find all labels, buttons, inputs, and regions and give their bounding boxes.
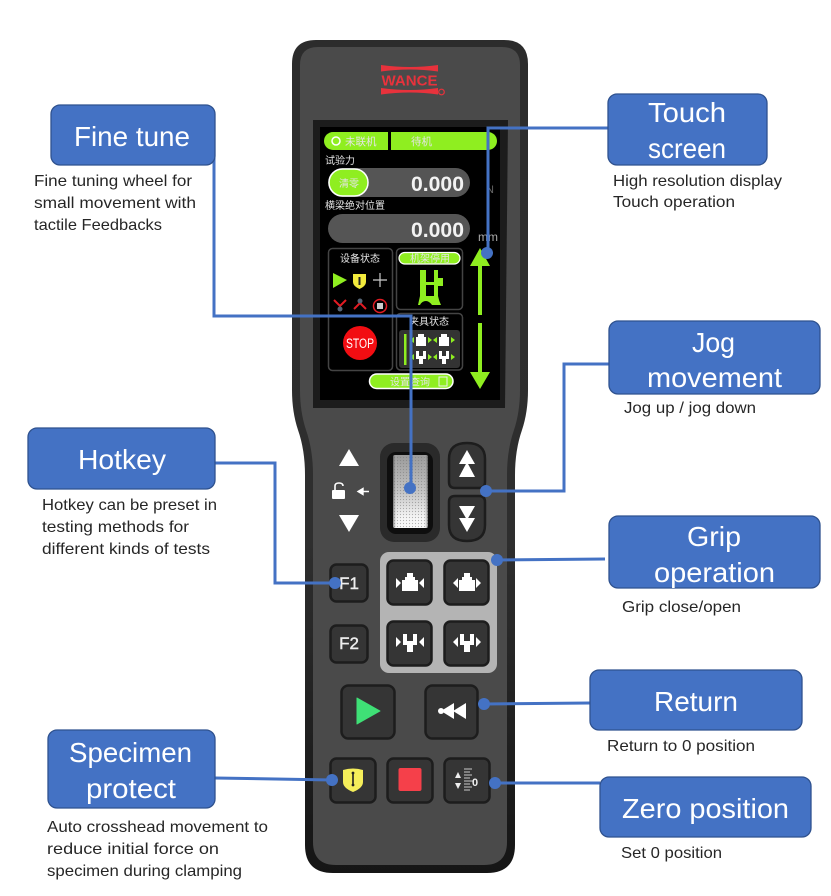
status bar pills — [324, 132, 497, 150]
position readout: 横梁绝对位置 — [325, 199, 385, 212]
description: specimen protect: Auto crosshead movement to — [47, 819, 268, 836]
stop key — [388, 758, 432, 802]
device status panel — [328, 248, 392, 370]
force readout: N — [486, 184, 494, 196]
callout: fine tune — [51, 105, 215, 165]
device status panel: 设备状态 — [340, 252, 380, 265]
description: hotkey: Hotkey can be preset in — [42, 497, 217, 514]
force readout: 试验力 — [325, 154, 355, 167]
jog down key — [449, 496, 485, 541]
callout: touch screen — [608, 94, 767, 165]
frame status panel: 机架停用 — [410, 252, 450, 265]
start key — [342, 686, 394, 738]
specimen protect key — [330, 758, 376, 802]
callout: specimen protect: protect — [86, 773, 176, 804]
description: jog: Jog up / jog down — [624, 400, 756, 417]
description: fine tune: Fine tuning wheel for — [34, 173, 193, 190]
callout: fine tune: Fine tune — [74, 121, 190, 152]
jog up key — [449, 443, 485, 488]
connector: jog — [486, 364, 609, 491]
grip key: lower open — [444, 622, 488, 666]
position readout: 0.000 — [411, 219, 464, 242]
connector: touch screen — [488, 128, 608, 253]
connector: zero position — [495, 782, 600, 784]
description: hotkey — [42, 497, 217, 558]
connector: specimen protect — [215, 778, 332, 780]
status bar pills: 未联机 — [345, 135, 377, 148]
callout: grip operation: Grip — [687, 521, 741, 552]
description: touch screen — [613, 173, 782, 211]
lock direction icons — [332, 449, 369, 532]
description: zero position: Set 0 position — [621, 845, 722, 862]
force readout: 清零 — [339, 177, 359, 190]
position readout: mm — [478, 230, 498, 244]
logo: WANCE: WANCE — [382, 72, 438, 90]
description: fine tune: small movement with — [34, 195, 196, 212]
frame status panel — [396, 248, 462, 310]
callout: hotkey — [28, 428, 215, 489]
connector: return — [484, 703, 590, 704]
device body — [292, 40, 528, 873]
description: specimen protect: reduce initial force on — [47, 841, 219, 858]
connector: hotkey — [215, 463, 335, 583]
callout: grip operation: operation — [654, 557, 775, 588]
status bar pills: 待机 — [411, 135, 432, 148]
grip key: lower close — [388, 622, 432, 666]
return key — [426, 686, 478, 738]
settings query pill: 设置查询 — [390, 376, 430, 388]
force readout — [325, 154, 494, 197]
description: touch screen: High resolution display — [613, 173, 782, 190]
grip keys panel — [380, 552, 497, 673]
clamp status panel: 夹具状态 — [409, 315, 449, 328]
connector end dots — [326, 247, 503, 789]
grip key: upper open — [444, 560, 488, 604]
description: fine tune — [34, 173, 196, 234]
description: touch screen: Touch operation — [613, 194, 735, 211]
callout: grip operation — [609, 516, 820, 588]
callout: jog movement — [609, 321, 820, 394]
logo: WANCE — [381, 65, 444, 95]
description: specimen protect — [47, 819, 268, 880]
controller device — [292, 40, 528, 873]
callout: zero position — [600, 777, 811, 837]
callout: hotkey: Hotkey — [78, 444, 166, 475]
F2 key — [330, 626, 368, 662]
F1 key — [330, 564, 368, 602]
description: return: Return to 0 position — [607, 738, 755, 755]
description: hotkey: different kinds of tests — [42, 541, 210, 558]
callout: return — [590, 670, 802, 730]
green jog up arrow — [470, 248, 490, 315]
callout: jog movement: movement — [647, 362, 782, 393]
force readout: 0.000 — [411, 173, 464, 196]
callout: zero position: Zero position — [622, 793, 789, 824]
description: hotkey: testing methods for — [42, 519, 190, 536]
connector lines and dots — [214, 128, 609, 783]
position readout — [325, 199, 498, 244]
description: fine tune: tactile Feedbacks — [34, 217, 162, 234]
clamp status panel — [396, 314, 462, 370]
F2 key: F2 — [339, 634, 359, 653]
callout: jog movement: Jog — [692, 327, 735, 358]
callout: touch screen: screen — [648, 133, 726, 164]
connector: grip — [497, 559, 605, 560]
fine tune wheel — [380, 443, 440, 542]
zero position key: 0 — [472, 777, 478, 789]
touch screen display — [313, 120, 508, 408]
screen bezel — [313, 120, 508, 408]
description: specimen protect: specimen during clamping — [47, 863, 242, 880]
connector: fine tune — [214, 140, 411, 488]
grip key: upper close — [388, 560, 432, 604]
callout: specimen protect — [48, 730, 215, 808]
callout: specimen protect: Specimen — [69, 737, 192, 768]
stop button on screen: STOP — [346, 336, 374, 351]
settings query pill — [370, 374, 453, 388]
callout: touch screen: Touch — [648, 97, 726, 128]
zero position key — [444, 758, 490, 802]
F1 key: F1 — [339, 574, 359, 593]
green jog down arrow — [470, 323, 490, 389]
callout: return: Return — [654, 686, 738, 717]
description: grip: Grip close/open — [622, 599, 741, 616]
